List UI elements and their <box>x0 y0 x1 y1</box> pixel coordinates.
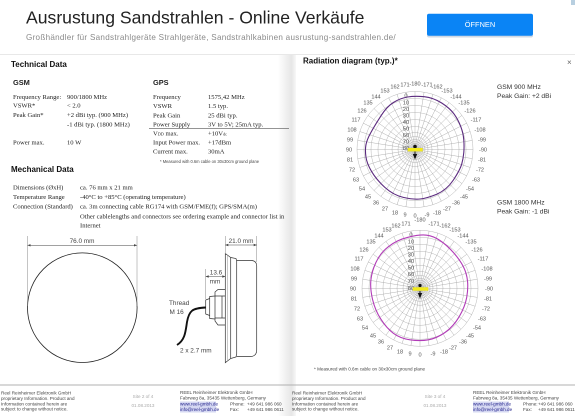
angle labels: -99 <box>484 276 492 282</box>
GPS specifications: 1.5 typ. <box>208 103 228 110</box>
angle labels: 18 <box>397 349 403 355</box>
dimension: 13.6 mm: 13.6 <box>210 270 223 276</box>
panel: technical data <box>11 60 289 164</box>
GSM specifications: GSM <box>13 78 30 87</box>
company contact: +49 641 986 060 <box>538 402 573 406</box>
dB scale labels: 30 <box>403 114 409 120</box>
company contact: info@reel-gmbh.de <box>180 407 220 412</box>
chart: GSM 1800 polar diagram <box>350 217 493 358</box>
page number and date: 01.08.2013 <box>424 403 447 408</box>
angle labels <box>350 217 493 358</box>
mechanical specifications: Dimensions (ØxH) <box>13 184 63 192</box>
company contact: +49 641 986 0611 <box>538 407 575 412</box>
page number and date: Site 3 of 4 <box>425 394 446 399</box>
angle labels: 99 <box>347 138 353 144</box>
page number and date: Site 2 of 4 <box>133 394 154 399</box>
dimension: 21.0 mm: 21.0 mm <box>229 238 253 245</box>
angle labels: 153 <box>382 227 392 233</box>
angle labels: -180 <box>409 82 421 88</box>
angle labels: 108 <box>347 128 357 134</box>
angle labels: -126 <box>471 247 483 253</box>
dB scale labels: 30 <box>408 252 414 258</box>
angle labels: -153 <box>441 88 453 94</box>
angle labels: 171 <box>400 82 410 88</box>
company contact: Phone: <box>523 402 538 406</box>
dB scale labels <box>408 232 414 292</box>
GPS specifications: 1575,42 MHz <box>208 94 245 101</box>
GPS specifications: 3V to 5V; 25mA typ. <box>208 122 264 128</box>
company contact: Fax: <box>230 407 239 412</box>
GPS specifications <box>149 78 289 164</box>
angle labels: -108 <box>474 128 486 134</box>
angle labels: 90 <box>346 148 352 154</box>
angle labels: -171 <box>421 82 433 88</box>
angle labels: 171 <box>401 221 411 227</box>
angle labels: 135 <box>363 100 373 106</box>
angle labels: -180 <box>414 217 426 223</box>
angle labels: 54 <box>362 325 368 331</box>
angle labels: -63 <box>472 178 480 184</box>
angle labels: 0 <box>413 214 417 220</box>
dB scale labels: 40 <box>403 120 409 126</box>
company contact: www.reel-gmbh.de <box>473 402 511 406</box>
angle labels: -36 <box>452 200 460 206</box>
angle labels: 126 <box>359 247 369 253</box>
angle labels: 162 <box>391 223 401 229</box>
angle labels: -162 <box>431 84 443 90</box>
dB scale labels: 20 <box>408 246 414 252</box>
angle labels <box>346 82 487 220</box>
label: GSM 1800 <box>497 200 550 216</box>
company contact: REEL Reinheimer Elektronik GmbH <box>473 390 546 395</box>
GPS specifications: +17dBm <box>208 140 232 146</box>
close mark: × <box>567 58 572 67</box>
angle labels: 45 <box>365 194 371 200</box>
angle labels: -9 <box>425 212 429 218</box>
legal notice <box>1 390 75 412</box>
angle labels: -153 <box>449 227 461 233</box>
polar grid <box>362 230 478 346</box>
banner divider <box>0 54 575 56</box>
angle labels: -9 <box>431 351 435 357</box>
angle labels: 9 <box>403 212 407 218</box>
mechanical specifications: Temperature Range <box>13 194 65 201</box>
legal notice: subject to change without notice. <box>1 406 68 412</box>
angle labels: 27 <box>387 345 393 351</box>
antenna marker <box>408 145 423 158</box>
angle labels: -63 <box>478 316 486 322</box>
legal notice: Information contained herein are <box>1 402 68 406</box>
angle labels: 72 <box>349 168 355 174</box>
angle labels: -126 <box>464 108 476 114</box>
GSM specifications: Peak Gain* <box>13 112 44 119</box>
legal notice: proprietary Information. Product and <box>1 396 75 401</box>
dB scale labels: 40 <box>408 259 414 265</box>
dB scale labels: 70 <box>403 140 409 146</box>
angle labels: -117 <box>471 118 481 124</box>
angle labels: 27 <box>382 206 388 212</box>
angle labels: -117 <box>478 256 488 262</box>
angle labels: 126 <box>357 108 367 114</box>
dB scale labels: 0 <box>404 94 408 100</box>
mechanical specifications: -40°C to +85°C (operating temperature) <box>80 194 186 201</box>
ad headline: Ausrustung Sandstrahlen - Online Verkäufe <box>26 8 364 28</box>
GPS specifications: VSWR <box>153 103 173 110</box>
mechanical specifications <box>13 184 285 230</box>
GPS specifications: 30mA <box>208 148 225 156</box>
page number and date <box>132 394 155 408</box>
dB scale labels: 60 <box>408 272 414 278</box>
angle labels: -18 <box>433 210 441 216</box>
drawing: antenna top view <box>28 236 137 362</box>
dimension: 13.6 mm <box>206 269 225 299</box>
dimension: 13.6 mm: mm <box>210 278 220 286</box>
cable <box>177 308 206 345</box>
legal notice: proprietary Information. Product and <box>292 396 366 401</box>
angle labels: 117 <box>352 118 360 124</box>
angle labels: 117 <box>355 256 363 262</box>
footer: right page <box>292 390 575 412</box>
angle labels: 36 <box>373 200 379 206</box>
drawing: antenna side view <box>169 236 257 363</box>
dB scale labels: 80 <box>408 286 414 292</box>
angle labels: 36 <box>378 339 384 345</box>
cable size label: 2 x 2.7 mm <box>180 348 212 354</box>
GSM specifications: < 2.0 <box>67 102 81 110</box>
angle labels: -72 <box>476 168 484 174</box>
GPS specifications: Current max. <box>153 148 188 156</box>
legal notice: Information contained herein are <box>292 402 359 406</box>
label: GSM 1800: GSM 1800 MHz <box>497 200 545 206</box>
GSM specifications: +2 dBi typ. (900 MHz) <box>67 112 128 119</box>
label: GSM 900 <box>497 84 552 100</box>
angle labels: -90 <box>485 286 493 292</box>
panel: mechanical data <box>11 165 285 230</box>
ad subtitle: Großhändler für Sandstrahlgeräte Strahlgeräte, Sandstrahlkabinen ausrustung-sandstrahlen.de/ <box>26 33 396 42</box>
legal notice <box>292 390 366 412</box>
ad choices icon <box>571 0 575 5</box>
angle labels: -27 <box>443 206 451 212</box>
GSM specifications: 900/1800 MHz <box>67 94 107 101</box>
angle labels: 63 <box>357 316 363 322</box>
angle labels: -99 <box>478 138 486 144</box>
angle labels: 54 <box>359 186 365 192</box>
dB scale labels: 10 <box>408 239 414 245</box>
heading: mechanical data: Mechanical Data <box>11 165 74 174</box>
angle labels: -144 <box>457 233 469 239</box>
GSM specifications: Frequency Range: <box>13 94 61 101</box>
label: GSM 900: Peak Gain: +2 dBi <box>497 93 552 100</box>
GPS specifications: Input Power max. <box>153 140 200 146</box>
angle labels: -45 <box>466 333 474 339</box>
angle labels: -162 <box>439 223 451 229</box>
mounting nut <box>215 290 225 325</box>
angle labels: 144 <box>371 94 381 100</box>
polar grid <box>357 92 473 208</box>
GPS specifications: GPS <box>153 78 169 87</box>
legal notice: subject to change without notice. <box>292 406 359 412</box>
angle labels: -45 <box>460 194 468 200</box>
footer rule <box>0 384 575 386</box>
company contact: +49 641 986 060 <box>247 402 282 406</box>
angle labels: 63 <box>353 178 359 184</box>
angle labels: -54 <box>466 186 474 192</box>
dB scale labels: 50 <box>408 265 414 271</box>
company contact: +49 641 986 0611 <box>247 407 284 412</box>
gain curve <box>365 96 464 199</box>
angle labels: -171 <box>428 221 440 227</box>
footer: left page <box>1 390 284 412</box>
angle labels: 162 <box>390 84 400 90</box>
angle labels: -90 <box>479 148 487 154</box>
angle labels: 135 <box>366 239 376 245</box>
angle labels: 81 <box>351 296 357 302</box>
angle labels: -18 <box>440 349 448 355</box>
angle labels: -108 <box>481 266 493 272</box>
heading: radiation diagram: Radiation diagram (typ.)* <box>303 56 399 66</box>
angle labels: 99 <box>351 276 357 282</box>
company contact: info@reel-gmbh.de <box>473 407 513 412</box>
company contact: www.reel-gmbh.de <box>180 402 218 406</box>
dB scale labels: 50 <box>403 126 409 132</box>
angle labels: 90 <box>350 286 356 292</box>
dB scale labels <box>403 94 409 152</box>
dB scale labels: 60 <box>403 133 409 139</box>
page gutter shadow <box>278 55 296 416</box>
angle labels: -27 <box>449 345 457 351</box>
angle labels: 9 <box>408 351 412 357</box>
GPS specifications: Peak Gain <box>153 112 181 120</box>
mechanical specifications: Internet <box>80 222 101 230</box>
angle labels: -81 <box>478 158 486 164</box>
angle labels: 81 <box>347 158 353 164</box>
legal notice: Reel Reinheimer Elektronik GmbH <box>1 390 71 396</box>
angle labels: -135 <box>465 239 477 245</box>
company contact <box>180 390 284 412</box>
company contact: Phone: <box>230 402 245 406</box>
angle labels: 153 <box>380 88 390 94</box>
dB scale labels: 20 <box>403 107 409 113</box>
mechanical specifications: ca. 3m connecting cable RG174 with GSM/FME(f); GPS/SMA(m) <box>80 204 257 210</box>
company contact: Fax: <box>523 407 532 412</box>
company contact: Fabrweg 8a, 35435 Wettenberg, Germany <box>473 396 560 400</box>
angle labels: -36 <box>459 339 467 345</box>
GSM specifications: VSWR* <box>13 102 35 110</box>
GPS specifications: +10Vdc <box>208 130 227 138</box>
angle labels: 108 <box>350 266 360 272</box>
GPS specifications: Frequency <box>153 94 182 101</box>
label: GSM 900: GSM 900 MHz <box>497 84 542 91</box>
page number and date <box>424 394 447 408</box>
angle labels: 45 <box>370 333 376 339</box>
angle labels: 72 <box>354 306 360 312</box>
mechanical specifications: ca. 76 mm x 21 mm <box>80 184 134 192</box>
angle labels: -81 <box>484 296 492 302</box>
dB scale labels: 80 <box>403 146 409 152</box>
chart: GSM 900 polar diagram <box>346 82 487 220</box>
angle labels: -72 <box>482 306 490 312</box>
GSM specifications <box>13 78 130 146</box>
page number and date: 01.08.2013 <box>132 403 155 408</box>
GPS specifications: VDD max. <box>153 130 179 138</box>
GPS specifications: * Measured with 0.6m cable on 30x30cm ground plane <box>160 159 260 164</box>
mechanical specifications: Connection (Standard) <box>13 204 73 210</box>
open button: ÖFFNEN <box>465 20 495 29</box>
company contact: Fabrweg 8a, 35435 Wettenberg, Germany <box>180 396 267 400</box>
company contact <box>473 390 575 412</box>
measurement note: * Measured with 0.6m cable on 30x30cm ground plane <box>314 366 426 372</box>
ad banner <box>0 0 575 67</box>
dB scale labels: 70 <box>408 279 414 285</box>
GPS specifications: Power Supply <box>153 122 191 128</box>
GSM specifications: 10 W <box>67 140 82 146</box>
angle labels: 0 <box>418 352 422 358</box>
angle labels: -135 <box>458 100 470 106</box>
gain curve <box>371 235 468 341</box>
angle labels: -144 <box>450 94 462 100</box>
angle labels: 18 <box>392 210 398 216</box>
legal notice: Reel Reinheimer Elektronik GmbH <box>292 390 362 396</box>
label: GSM 1800: Peak Gain: -1 dBi <box>497 208 550 216</box>
dB scale labels: 0 <box>409 232 413 238</box>
angle labels: 144 <box>374 233 384 239</box>
company contact: REEL Reinheimer Elektronik GmbH <box>180 390 253 395</box>
open button <box>427 14 533 38</box>
heading: technical data: Technical Data <box>11 60 67 69</box>
antenna marker <box>413 284 428 298</box>
flange and dome <box>225 254 231 363</box>
GSM specifications: -1 dBi typ. (1800 MHz) <box>67 122 130 128</box>
thread label: Thread <box>169 300 190 307</box>
mechanical specifications: Other cablelengths and connectors see ordering example and connector list in <box>80 214 285 220</box>
GPS specifications: 25 dBi typ. <box>208 112 238 120</box>
drawing: antenna top view: 76.0 mm <box>70 238 94 245</box>
GSM specifications: Power max. <box>13 140 45 146</box>
dB scale labels: 10 <box>403 100 409 106</box>
angle labels: -54 <box>473 325 481 331</box>
drawing: antenna side view: M 16 <box>170 309 184 316</box>
